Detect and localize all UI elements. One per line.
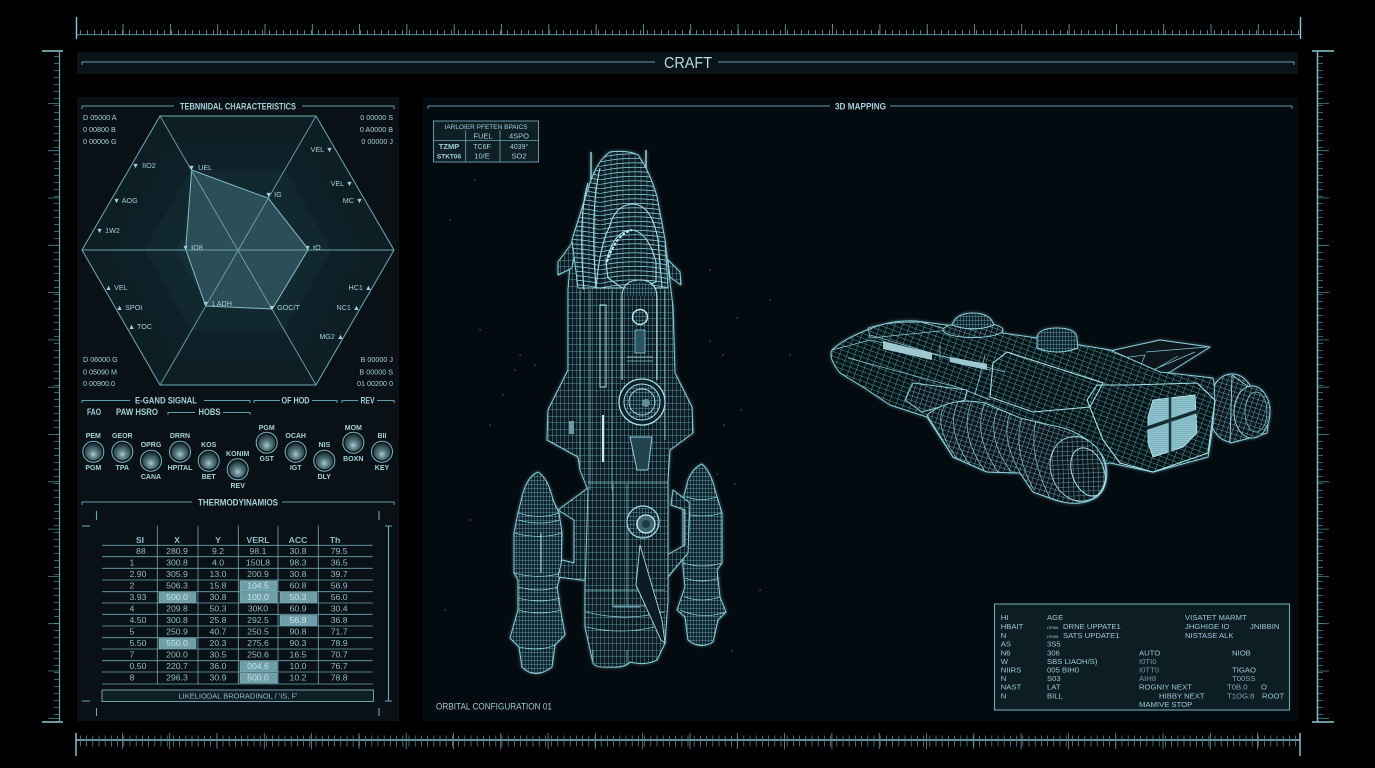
table rows: 39.7: [331, 569, 348, 579]
table rows: 13.0: [210, 569, 227, 579]
data readout panel: JNIBBIN: [1250, 622, 1279, 631]
table rows: 98.3: [290, 558, 307, 568]
heading: technical characteristics: TEBNNIDAL CHARACTERISTICS: [180, 102, 296, 112]
table rows: [130, 546, 348, 682]
tail wing: [1065, 340, 1210, 385]
table rows: 56.9: [331, 580, 348, 590]
table rows: 78.9: [331, 638, 348, 648]
data readout panel: NIIRS: [1001, 666, 1021, 675]
title bar: [77, 52, 1298, 74]
table rows: 20.3: [210, 638, 227, 648]
data readout panel: DRM8: [1047, 625, 1059, 630]
data readout panel: SBS LIAOH/S): [1047, 657, 1098, 666]
table rows: 550.0: [166, 638, 188, 648]
table rows: 56.0: [331, 592, 348, 602]
table rows: 90.3: [290, 638, 307, 648]
data readout panel: N: [1001, 674, 1006, 683]
dome panel: [582, 168, 662, 290]
mini readout table: SO2: [511, 152, 527, 160]
table rows: 4.50: [130, 615, 147, 625]
table rows: 36.5: [331, 558, 348, 568]
heading: technical characteristics: [82, 102, 394, 112]
data readout panel: VISATET MARMT: [1185, 613, 1247, 622]
table rows: 2.90: [130, 569, 147, 579]
top ruler: [76, 17, 1300, 39]
radar axis labels: MG2 ▲: [319, 332, 344, 341]
radar corner readouts: B 00000 S: [359, 368, 393, 376]
table header: VERL: [246, 535, 270, 545]
table header: [136, 535, 340, 545]
table rows: 30K0: [248, 604, 268, 614]
table rows: 36.0: [210, 661, 227, 671]
table rows: 506.3: [166, 580, 188, 590]
radar corner readouts: D 06000 G: [83, 355, 118, 364]
rear windows: [1147, 395, 1198, 457]
mini readout table: IARLOIER PFETEN BPAICS: [445, 124, 528, 131]
top fins: [558, 235, 681, 285]
data readout panel: TIGAO: [1232, 666, 1256, 675]
mini readout table: STKT06: [437, 154, 461, 160]
table rows: 4.0: [212, 558, 224, 568]
data readout panel: [994, 604, 1290, 710]
caption: orbital configuration: ORBITAL CONFIGURATION 01: [436, 702, 552, 712]
data readout panel: AGE: [1047, 613, 1063, 622]
table rows: 15.8: [210, 580, 227, 590]
data readout panel: HI: [1001, 613, 1008, 622]
table rows: 250.6: [247, 650, 269, 660]
mini readout table: 4SPO: [509, 132, 529, 140]
table header: X: [174, 535, 180, 545]
table rows: 8: [130, 672, 134, 682]
table header: Y: [215, 535, 221, 545]
nose curved mesh: [572, 151, 668, 288]
table rows: 100.0: [247, 592, 269, 602]
signal headings: E-GAND SIGNAL: [135, 396, 197, 406]
table grid: [102, 526, 373, 684]
panel: signal controls: [82, 396, 394, 490]
heading: thermodynamics: [82, 498, 394, 508]
table rows: 88: [136, 546, 146, 556]
heading: 3D mapping: 3D MAPPING: [835, 102, 886, 112]
data readout panel: AS: [1001, 640, 1011, 649]
panel: technical characteristics radar: [82, 102, 394, 388]
table rows: 200.9: [247, 569, 269, 579]
data readout panel: AIH8: [1139, 674, 1156, 683]
data readout panel: T1OG:8: [1227, 691, 1254, 700]
mini readout table: TC6F: [473, 144, 491, 151]
table rows: 78.8: [331, 672, 348, 682]
table rows: 250.9: [166, 626, 188, 636]
table rows: 292.5: [247, 615, 269, 625]
antennas: [591, 150, 646, 186]
table rows: 1: [130, 558, 134, 568]
knob labels: GEOR: [112, 433, 133, 440]
data readout panel: LAT: [1047, 683, 1061, 692]
table rows: 300.8: [166, 615, 188, 625]
data readout panel: HIBBY NEXT: [1159, 691, 1205, 700]
table rows: 30.8: [210, 592, 227, 602]
data readout panel: ROGNIY NEXT: [1139, 683, 1192, 692]
heading: thermodynamics: THERMODYINAMIOS: [198, 498, 278, 508]
data readout panel: 005 BIH0: [1047, 666, 1079, 675]
table rows: 5: [130, 626, 134, 636]
main hull: [831, 321, 1215, 473]
table rows: 30.8: [290, 546, 307, 556]
rear engine: [1208, 374, 1270, 443]
radar corner readouts: D 05000 A: [83, 113, 117, 122]
data readout panel: NISTASE ALK: [1185, 631, 1234, 640]
data readout panel: S03: [1047, 674, 1061, 683]
table rows: 50.3: [210, 604, 227, 614]
knob labels: BII: [378, 433, 387, 440]
knob labels: PGM: [85, 465, 101, 472]
data readout panel: NAST: [1001, 683, 1022, 692]
table header: SI: [136, 535, 144, 545]
data readout panel: JHGHIGE IO: [1185, 622, 1229, 631]
table rows: 305.9: [166, 569, 188, 579]
table rows: 150L8: [246, 558, 270, 568]
knob labels: DLY: [318, 474, 331, 481]
signal headings: [82, 396, 394, 418]
data readout panel: N: [1001, 691, 1006, 700]
table rows: 280.9: [166, 546, 188, 556]
knob labels: PEM: [86, 433, 101, 440]
knob labels: OPRG: [141, 442, 162, 449]
data readout panel: DRNE UPPATE1: [1063, 622, 1121, 631]
table rows: 0.50: [130, 661, 147, 671]
table footer box: LIKELIODAL BRORADINOL / 'IS, F': [178, 692, 298, 701]
knob labels: BOXN: [343, 456, 363, 463]
table rows: 90.8: [290, 626, 307, 636]
table rows: 70.7: [331, 650, 348, 660]
hull highlight strips: [832, 322, 1005, 400]
table rows: 30.9: [210, 672, 227, 682]
icon: side-view wireframe spacecraft: [831, 313, 1270, 509]
table rows: 2: [130, 580, 134, 590]
radar corner readouts: 0 00000 J: [361, 137, 393, 146]
radar corner readouts: 0 00900.0: [83, 379, 115, 388]
signal headings: REV: [360, 396, 375, 406]
radar corner readouts: B 00000 J: [361, 355, 393, 364]
radar corner readouts: 0 05090 M: [83, 368, 117, 376]
knob labels: CANA: [141, 474, 161, 481]
mini readout table: [434, 121, 538, 162]
data readout panel: N6: [1001, 648, 1011, 657]
data readout panel: T0B.0: [1227, 683, 1248, 692]
data readout panel: DRM8: [1047, 634, 1059, 639]
engine ring: [619, 379, 665, 425]
data readout panel: W: [1001, 657, 1009, 666]
mini readout table: FUEL: [473, 132, 493, 140]
radar chart: [82, 116, 394, 385]
radar axis labels: VEL ▼: [331, 179, 353, 188]
mini readout table: 10/E: [474, 152, 490, 160]
radar axis labels: ▼ GOC/T: [268, 303, 300, 312]
radar axis labels: ▼ 1W2: [96, 226, 120, 235]
table rows: 30.8: [290, 569, 307, 579]
knob labels: KEY: [375, 465, 390, 472]
table header: Th: [330, 535, 340, 545]
central door and porthole: [580, 280, 665, 490]
knob labels: HPITAL: [168, 465, 193, 472]
table rows: 60.8: [290, 580, 307, 590]
knob labels: KOS: [201, 442, 217, 449]
table rows: 10.2: [290, 672, 307, 682]
radar axis labels: ▼ 1 ADH: [202, 299, 232, 308]
mini readout table: TZMP: [439, 142, 459, 151]
stars: [445, 180, 790, 651]
radar axis labels: ▲ VEL: [105, 283, 128, 292]
top domes: [943, 313, 1078, 352]
table rows: 275.6: [247, 638, 269, 648]
knob labels: KONIM: [226, 451, 250, 458]
knob labels: OCAH: [285, 433, 306, 440]
knob labels: GST: [260, 456, 275, 463]
table rows: 56.9: [290, 615, 307, 625]
signal headings: OF HOD: [282, 396, 310, 406]
table rows: 3.93: [130, 592, 147, 602]
table rows: 30.4: [331, 604, 348, 614]
table rows: 50.3: [290, 592, 307, 602]
radar axis labels: ▲ SPOI: [116, 303, 142, 312]
knob labels: PGM: [259, 425, 275, 432]
radar corner readouts: 0 00006 G: [83, 137, 117, 146]
radar axis labels: HC1 ▲: [348, 283, 372, 292]
data readout panel: HBAIT: [1001, 622, 1024, 631]
radar axis labels: ▼ UEL: [188, 163, 212, 172]
heading: 3D mapping: [428, 102, 1292, 112]
mini readout table: 4039°: [510, 143, 528, 151]
table rows: 60.9: [290, 604, 307, 614]
data readout panel: BILL: [1047, 691, 1064, 700]
data readout panel: NIOB: [1232, 648, 1251, 657]
table rows: 004.6: [247, 661, 269, 671]
table rows: 79.5: [331, 546, 348, 556]
data readout panel: O: [1261, 683, 1267, 692]
radar axis labels: MC ▼: [343, 196, 363, 205]
knob labels: IGT: [290, 465, 302, 472]
data readout panel: MAMIVE STOP: [1139, 700, 1192, 709]
radar corner readouts: 0 00800 B: [83, 125, 116, 134]
data readout panel: T00SS: [1232, 674, 1256, 683]
radar axis labels: ▼ IIO2: [132, 161, 156, 170]
radar axis labels: NC1 ▲: [336, 303, 360, 312]
right booster: [677, 464, 726, 646]
knob labels: REV: [230, 483, 245, 490]
table rows: 220.7: [166, 661, 188, 671]
table rows: 71.7: [331, 626, 348, 636]
table rows: 250.5: [247, 626, 269, 636]
table rows: 40.7: [210, 626, 227, 636]
front engine: [927, 401, 1115, 509]
table rows: 200.0: [166, 650, 188, 660]
knob labels: TPA: [116, 465, 129, 472]
struts: [558, 488, 690, 582]
table rows: 300.8: [166, 558, 188, 568]
table footer box: [102, 690, 374, 702]
data readout panel: I0TI0: [1139, 657, 1157, 666]
right ruler: [1312, 51, 1334, 722]
title: CRAFT: [664, 55, 712, 72]
knob labels: NIS: [318, 442, 330, 449]
knob labels: DRRN: [170, 433, 190, 440]
radar axis labels: ▼ tO: [304, 243, 321, 252]
data readout panel: 3S5: [1047, 640, 1061, 649]
radar corner readouts: 0 00000 S: [360, 113, 393, 122]
signal headings: HOBS: [198, 407, 220, 418]
knob labels: MOM: [345, 425, 362, 432]
table rows: 104.5: [247, 580, 269, 590]
table rows: 500.0: [247, 672, 269, 682]
lower fuselage details: [569, 415, 668, 663]
radar axis labels: VEL ▼: [311, 145, 333, 154]
front lower block: [905, 383, 967, 412]
radar axis labels: ▼ IO8: [182, 243, 203, 252]
knob labels: BET: [202, 474, 216, 481]
data readout panel: 306: [1047, 648, 1060, 657]
data readout panel: N: [1001, 631, 1006, 640]
table rows: 76.7: [331, 661, 348, 671]
signal headings: PAW HSRO: [116, 407, 158, 418]
data readout panel: I0TT0: [1139, 666, 1159, 675]
rear block: [1087, 383, 1215, 472]
highlighted table cells: [159, 581, 317, 683]
data readout panel: ROOT: [1262, 691, 1285, 700]
radar axis labels: [96, 145, 372, 341]
table rows: 209.8: [166, 604, 188, 614]
radar axis labels: ▼ IG: [265, 190, 282, 199]
table rows: 5.50: [130, 638, 147, 648]
lower fins and main hull: [547, 151, 693, 667]
data readout panel: AUTO: [1139, 648, 1160, 657]
radar axis labels: ▼ AOG: [113, 196, 138, 205]
table rows: 36.8: [331, 615, 348, 625]
signal headings: FAO: [87, 407, 101, 418]
data readout panel: SATS UPDATE1: [1063, 631, 1120, 640]
left ruler: [42, 51, 63, 722]
bottom ruler: [76, 733, 1300, 756]
radar data polygon: [186, 170, 308, 309]
knobs: [83, 432, 393, 480]
knob labels: [85, 425, 390, 490]
panel: left column: [77, 97, 399, 721]
left booster: [510, 472, 565, 674]
panel: thermodynamics table: [82, 498, 394, 716]
table rows: 4: [130, 604, 134, 614]
table rows: 500.0: [166, 592, 188, 602]
table rows: 98.1: [250, 546, 267, 556]
table frame marks: [82, 511, 392, 716]
side armor panel: [990, 352, 1103, 412]
radar corner readouts: 0 A0000 B: [360, 125, 393, 134]
table rows: 296.3: [166, 672, 188, 682]
radar axis labels: ▲ TOC: [128, 322, 152, 331]
radar corner readouts: 01 00200 0: [357, 379, 393, 388]
table rows: 30.5: [210, 650, 227, 660]
radar corner readouts: [83, 113, 393, 388]
table rows: 9.2: [212, 546, 224, 556]
panel: 3D mapping: [423, 97, 1298, 721]
table header: ACC: [289, 535, 308, 545]
icon: vertical wireframe spacecraft: [510, 150, 726, 674]
table rows: 10.0: [290, 661, 307, 671]
table rows: 16.5: [290, 650, 307, 660]
table rows: 25.8: [210, 615, 227, 625]
table rows: 7: [130, 650, 134, 660]
